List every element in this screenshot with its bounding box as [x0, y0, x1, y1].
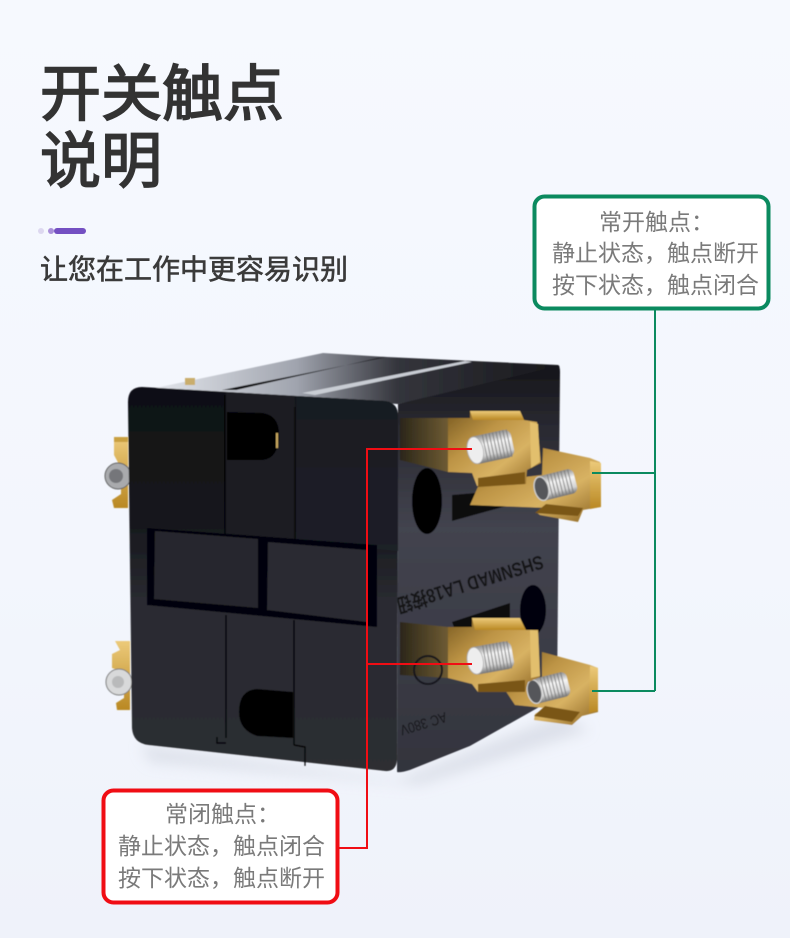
callout: normally open contact: 按下状态，触点闭合: [552, 272, 759, 298]
left button: [154, 531, 258, 608]
accent dots and bar: [38, 228, 86, 234]
top face: [155, 353, 560, 404]
front seams: [217, 395, 305, 766]
far lower terminal: [505, 652, 598, 725]
connector lines: normally open contacts (green): [592, 310, 655, 691]
title: [40, 60, 284, 195]
title: 开关触点: [40, 60, 284, 128]
product: push-button switch: [105, 353, 601, 785]
near lower terminal: [448, 618, 540, 692]
near upper terminal: [448, 411, 541, 487]
callout: normally closed contact: 按下状态，触点断开: [118, 865, 325, 891]
subtitle: 让您在工作中更容易识别: [40, 254, 348, 285]
side slot: [452, 490, 510, 521]
callout: normally open contact: 静止状态，触点断开: [552, 240, 759, 266]
side mounting hole upper: [412, 468, 442, 534]
left terminal lower: [106, 641, 132, 710]
contact glint: [276, 433, 278, 448]
front face: [128, 387, 398, 771]
right button: [267, 542, 367, 622]
callout: normally closed contact: 常闭触点：: [165, 801, 280, 827]
callout: normally open contact: 常开触点：: [599, 209, 714, 235]
callout: normally closed contact: [104, 790, 338, 902]
lower contact strip: [400, 622, 448, 678]
far upper terminal: [470, 448, 601, 522]
button recess: [147, 528, 377, 627]
title: 说明: [40, 127, 162, 195]
side slot lower: [452, 603, 510, 630]
round certification mark: [414, 656, 442, 684]
callout: normally closed contact: 静止状态，触点闭合: [118, 833, 325, 859]
top window: [227, 412, 279, 460]
left terminal upper: [105, 437, 131, 508]
center column: [226, 392, 295, 540]
embossed rating text: AC 380V: [398, 709, 449, 739]
side mounting hole lower: [520, 585, 546, 635]
upper right front panel: [296, 396, 398, 551]
floor shadow: [140, 715, 590, 785]
connector lines: normally closed contacts (red): [339, 449, 472, 848]
side face: [397, 366, 560, 772]
bottom window: [239, 689, 293, 738]
callout: normally open contact: [534, 196, 768, 308]
embossed brand text: SHSNMAD LA18按钮: [393, 551, 546, 618]
upper contact strip: [400, 418, 448, 472]
